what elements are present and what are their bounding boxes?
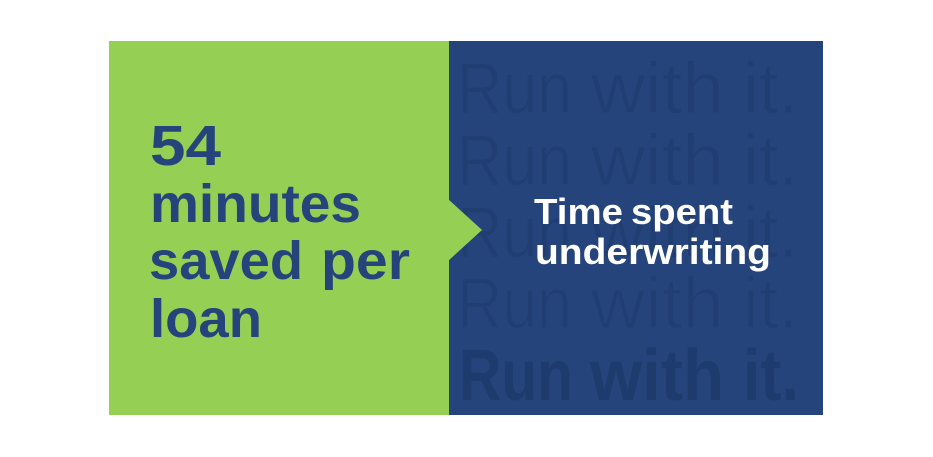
label: time spent underwriting (534, 191, 771, 272)
watermark: repeated tagline: with (590, 121, 724, 201)
panel: green statistic (109, 41, 449, 415)
headline: 54 minutes saved per loan: loan (150, 289, 262, 349)
watermark: repeated tagline: with (590, 193, 724, 273)
watermark: repeated tagline: Run (459, 336, 573, 416)
watermark: repeated tagline: Run (457, 121, 572, 201)
headline: 54 minutes saved per loan: 54 (150, 114, 221, 178)
watermark: repeated tagline (457, 49, 799, 416)
watermark: repeated tagline: with (590, 264, 724, 344)
watermark: repeated tagline: Run (457, 193, 572, 273)
watermark: repeated tagline: it. (743, 264, 798, 344)
headline: 54 minutes saved per loan (149, 114, 410, 349)
label: time spent underwriting: spent (631, 191, 733, 232)
headline: 54 minutes saved per loan: per (321, 231, 410, 291)
watermark: repeated tagline: Run (457, 264, 572, 344)
headline: 54 minutes saved per loan: minutes (150, 174, 361, 234)
watermark: repeated tagline: with (590, 49, 724, 129)
watermark: repeated tagline: with (589, 336, 724, 416)
watermark: repeated tagline: Run (457, 49, 572, 129)
arrow: green pointer (448, 199, 482, 261)
panel: navy background (449, 41, 823, 415)
watermark: repeated tagline: it. (743, 336, 799, 416)
watermark: repeated tagline: it. (743, 121, 798, 201)
watermark: repeated tagline: it. (743, 49, 798, 129)
label: time spent underwriting: underwriting (535, 231, 771, 272)
headline: 54 minutes saved per loan: saved (149, 231, 303, 291)
label: time spent underwriting: Time (534, 191, 623, 232)
watermark: repeated tagline: it. (743, 193, 798, 273)
